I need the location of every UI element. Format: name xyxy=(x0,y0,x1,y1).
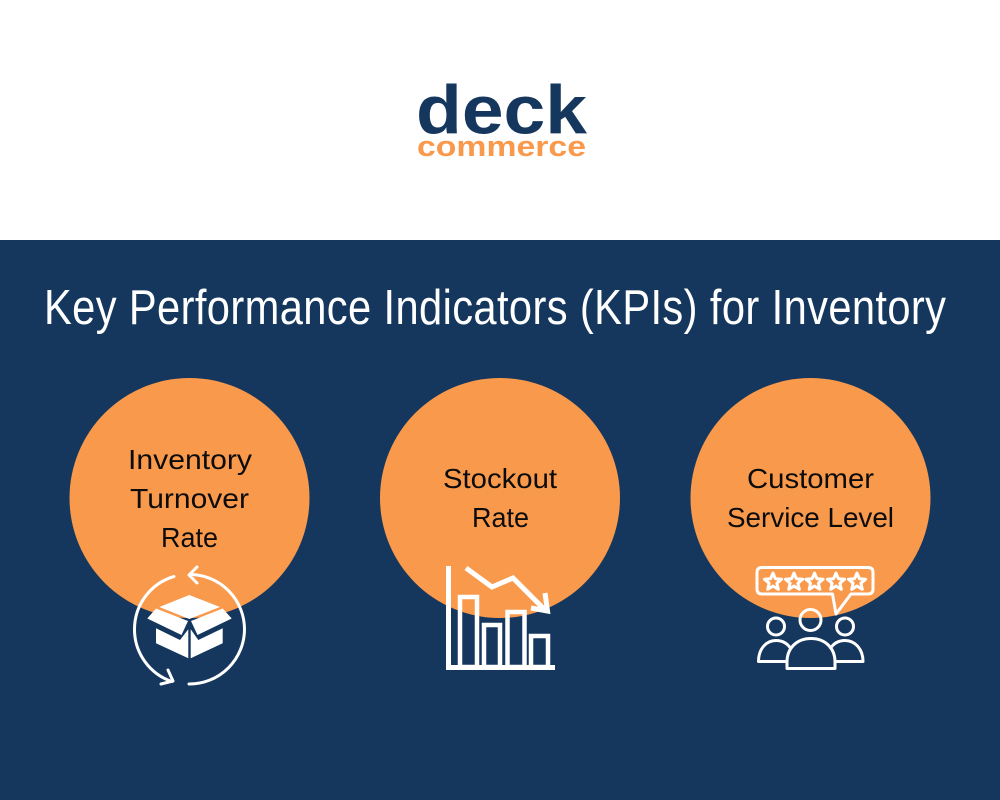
label: inventory turnover rate xyxy=(128,444,252,553)
logo: deck commerce: deck xyxy=(416,72,588,148)
title: Key Performance Indicators (KPIs) for Inventory xyxy=(44,280,946,335)
icon: customers with star rating xyxy=(757,568,873,668)
logo: deck commerce: commerce xyxy=(417,131,586,163)
circle: stockout rate xyxy=(380,378,620,618)
panel: customer service level xyxy=(690,378,930,668)
panel: stockout rate xyxy=(380,378,620,668)
panel: inventory turnover rate xyxy=(70,378,310,684)
circle: inventory turnover rate xyxy=(70,378,310,618)
label: inventory turnover rate: Turnover xyxy=(130,483,249,514)
label: stockout rate: Stockout xyxy=(443,463,557,494)
label: customer service level xyxy=(727,463,894,533)
label: customer service level: Service Level xyxy=(727,502,894,533)
label: customer service level: Customer xyxy=(747,463,874,494)
label: stockout rate: Rate xyxy=(472,502,529,533)
icon: box with circular arrows xyxy=(134,567,244,684)
label: inventory turnover rate: Inventory xyxy=(128,444,252,475)
icon: declining bar chart xyxy=(448,566,555,668)
circle: customer service level xyxy=(690,378,930,618)
label: stockout rate xyxy=(443,463,557,533)
label: inventory turnover rate: Rate xyxy=(161,522,218,553)
panel: navy background xyxy=(0,240,1000,800)
